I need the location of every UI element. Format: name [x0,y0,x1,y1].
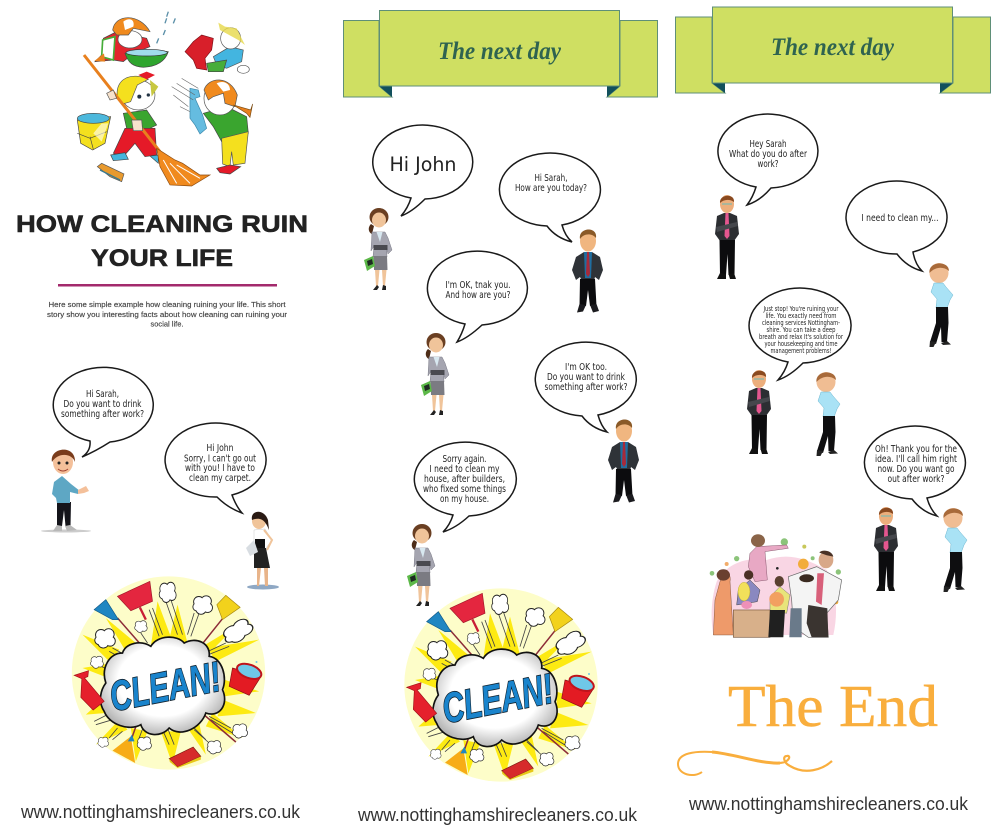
speech bubble: Hi Sarah: Hi Sarah, [534,173,568,184]
speech bubble: Sorry again: who fixed some things [423,484,506,495]
speech bubble: I need to clean [846,181,947,271]
speech bubble: Just stop: Just stop! You're ruining your [763,304,839,313]
speech bubble: Just stop: shire. You can take a deep [766,325,836,334]
ribbon banner [344,10,658,97]
intro text: Here some simple example how cleaning ruining your life. This short [48,300,286,309]
character: John in suit [572,229,603,312]
the end heading: The End [728,673,938,739]
speech bubble: I need to clean: I need to clean my... [862,213,938,224]
speech bubble: Hey Sarah: What do you do after [729,149,807,160]
character: John in suit [608,419,639,502]
speech bubble: I'm OK too: I'm OK too. [565,362,607,373]
title: HOW CLEANING RUIN [16,211,308,238]
speech bubble: Just stop: breath and relax It's solution for [759,332,844,341]
speech bubble: Hi Sarah: How are you today? [515,183,587,194]
website url: www.nottinghamshirecleaners.co.uk [20,802,301,822]
speech bubble: Sarah declines: with you! I have to [185,463,255,474]
speech bubble: Oh thank you [864,426,965,516]
speech bubble: Just stop: your housekeeping and time [764,339,838,348]
speech bubble: Oh thank you: out after work? [888,474,945,485]
speech bubble: I'm OK: And how are you? [446,290,511,301]
illustration: children cleaning [77,12,253,186]
speech bubble: Sorry again [414,442,516,532]
character: Sarah in grey suit [421,333,449,415]
speech bubble: Hi Sarah [499,153,600,242]
ribbon banner: The next day [771,34,895,61]
intro text [47,300,287,328]
website url: www.nottinghamshirecleaners.co.uk [357,805,638,825]
panel: the next day part 2 [676,7,990,814]
character: John with crossed arms [747,370,771,454]
flourish [678,752,832,775]
speech bubble: I'm OK too [535,342,636,432]
center child [123,110,157,132]
speech bubble: Hey Sarah [718,114,818,205]
speech bubble: Just stop: life. You exactly need from [766,311,836,320]
broom head [157,148,210,186]
bucket [77,117,111,150]
character: John in casual sweater [41,450,91,532]
illustration: office party [710,534,842,637]
title underline [58,284,277,286]
intro text: story show you interesting facts about how cleaning can ruining your [47,310,287,319]
speech bubble: John invites: Do you want to drink [64,399,142,410]
illustration: clean burst [72,576,265,770]
speech bubble: Oh thank you: idea. I'll call him right [875,454,957,465]
speech bubble: Hi John: Hi John [390,153,456,176]
brush [97,163,124,182]
speech bubble: Just stop: management problems! [770,346,832,355]
character: John with crossed arms [874,507,898,591]
speech bubble: Hi John [373,125,473,216]
speech bubble: I'm OK too: Do you want to drink [547,372,625,383]
speech bubble: Sarah declines: Hi John [206,443,234,454]
speech bubble: Sorry again: I need to clean my [430,464,500,475]
speech bubble: Hey Sarah: Hey Sarah [750,139,787,150]
speech bubble: I'm OK [427,251,527,342]
ribbon banner: The next day [438,38,562,65]
title: YOUR LIFE [91,245,233,272]
speech bubble: Sorry again: house, after builders, [424,474,505,485]
right child [203,107,248,142]
character: Sarah in blue shirt [929,263,953,347]
title [16,211,308,272]
speech bubble: Oh thank you: now. Do you want go [878,464,955,475]
illustration: clean burst: CLEAN! [106,653,224,720]
speech bubble: Oh thank you: Oh! Thank you for the [875,444,957,455]
character: Sarah in blue shirt [943,508,967,592]
character: Sarah in grey suit [407,524,435,606]
speech bubble: John invites: Hi Sarah, [86,389,119,400]
panel: intro [16,12,308,822]
intro text: social life. [150,320,184,328]
character: Sarah in black dress [246,512,279,590]
character: Sarah in grey suit [364,208,392,290]
character: John with crossed arms [715,195,739,279]
speech bubble: Sarah declines: Sorry, I can't go out [184,454,256,464]
speech bubble: John invites [53,367,153,457]
ribbon banner [676,7,990,93]
speech bubble: Sarah declines [165,423,266,513]
speech bubble: Just stop: cleaning services Nottingham- [762,318,840,327]
character: Sarah in blue shirt [816,372,840,456]
top right baby [213,47,243,68]
speech bubble: Hey Sarah: work? [758,159,779,170]
speech bubble: I'm OK too: something after work? [544,382,628,393]
illustration: clean burst [404,588,598,782]
speech bubble: Just stop [749,288,851,380]
speech bubble: Sorry again: on my house. [440,494,489,505]
illustration: clean burst: CLEAN! [438,665,557,732]
panel: the next day part 1 [344,10,658,825]
speech bubble: Sarah declines: clean my carpet. [189,473,251,484]
speech bubble: John invites: something after work? [61,409,144,420]
broom handle [84,55,160,152]
top child washing [95,32,150,62]
speech bubble: Sorry again: Sorry again. [442,454,486,465]
speech bubble: I'm OK: I'm OK, tnak you. [446,280,510,291]
website url: www.nottinghamshirecleaners.co.uk [688,794,969,814]
